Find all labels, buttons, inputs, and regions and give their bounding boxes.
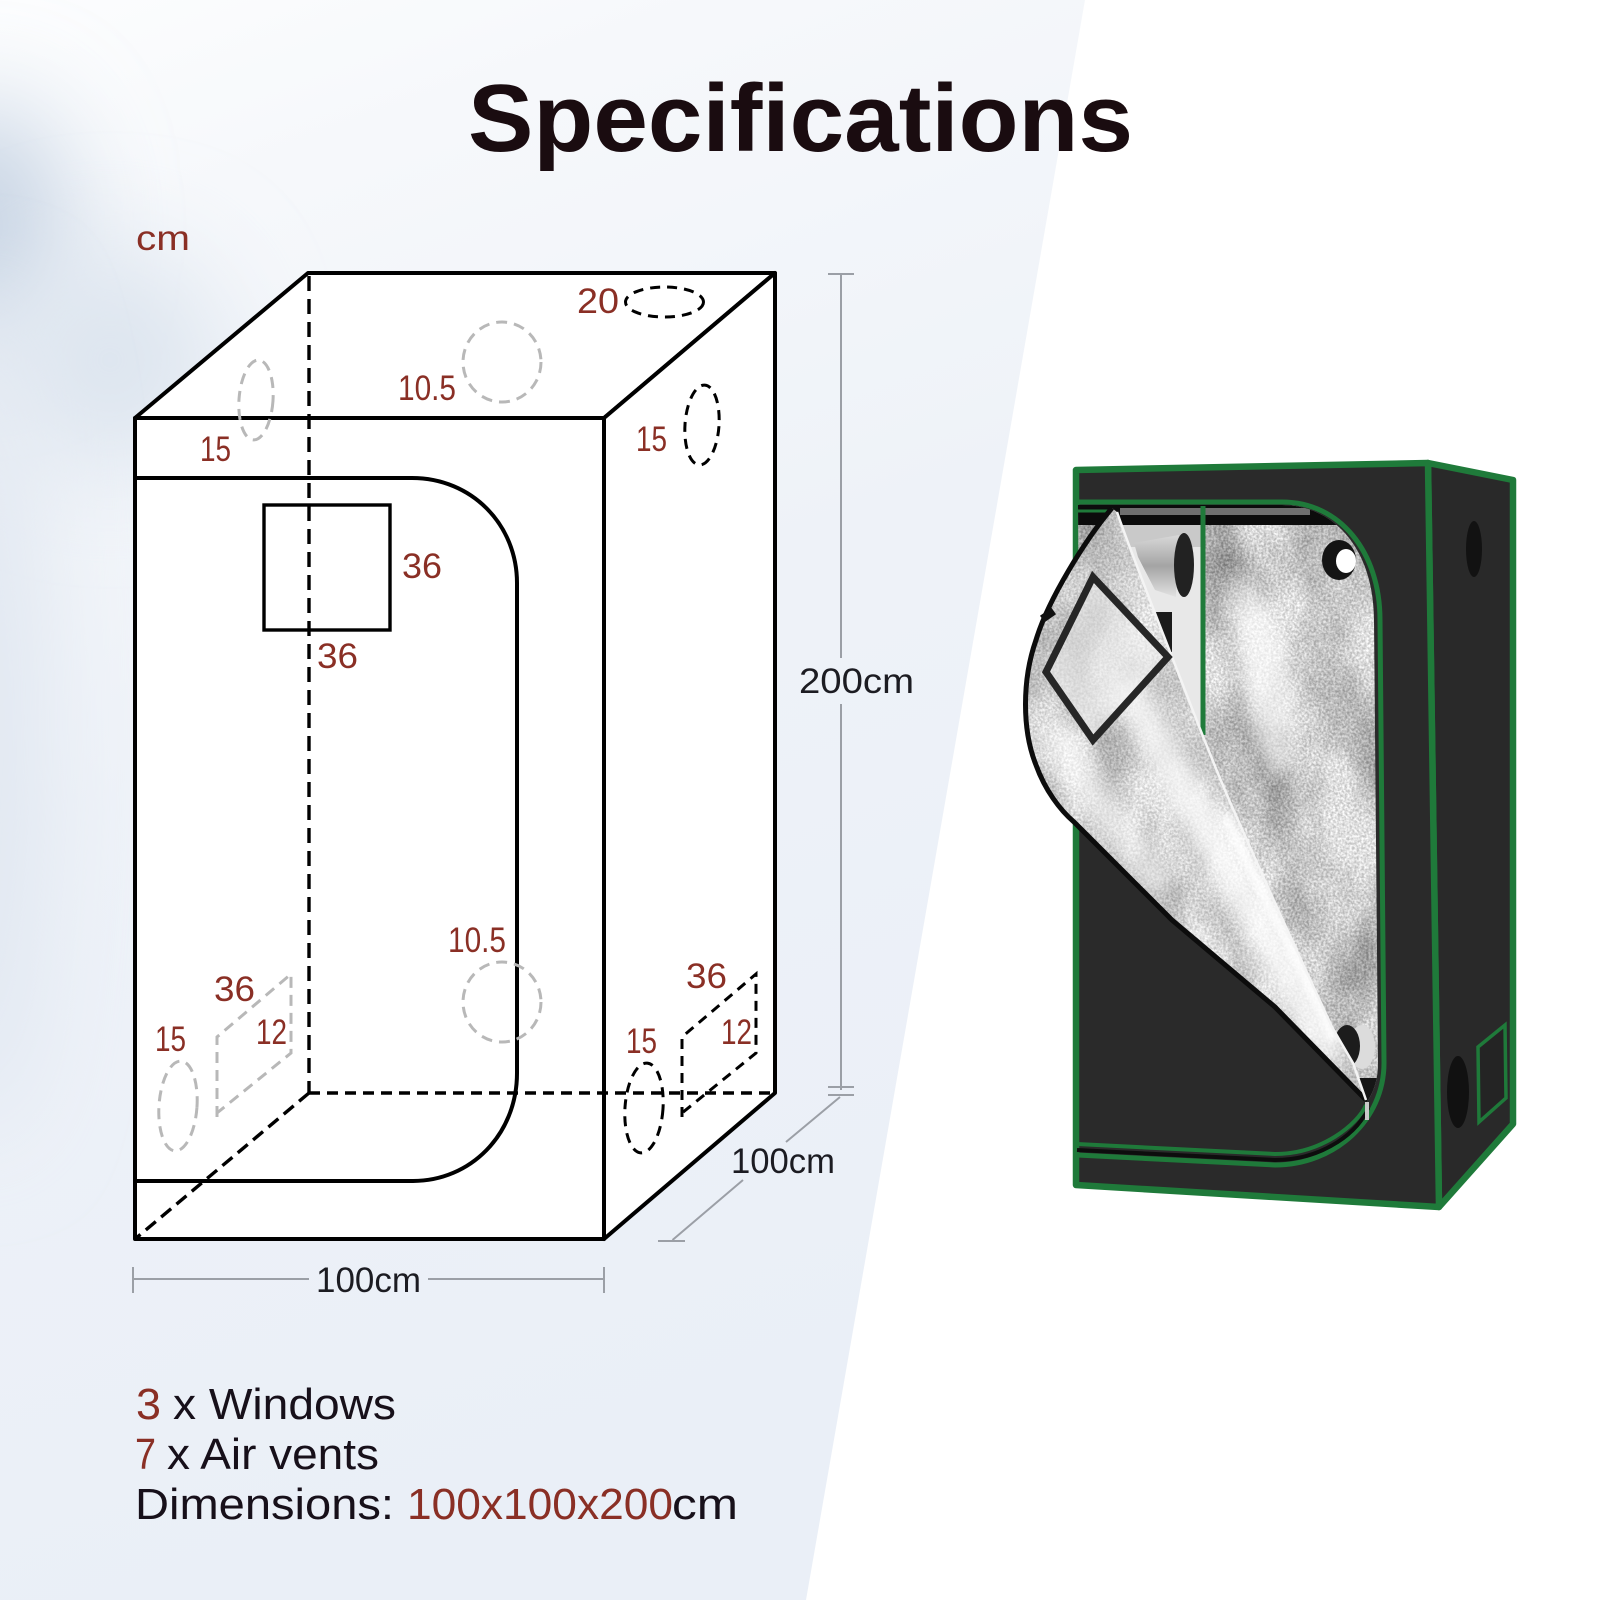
- inner vent collar bottom: [1334, 1025, 1375, 1069]
- measurement labels: 15: [200, 430, 231, 469]
- summary text block: cm: [672, 1480, 738, 1529]
- side air vent lower: [1447, 1056, 1469, 1128]
- measurement labels: 10.5: [448, 921, 506, 960]
- grey hidden vents: [156, 322, 541, 1152]
- dimension: height 200cm: 200cm: [799, 662, 914, 701]
- dimension: depth 100cm: 100cm: [731, 1142, 835, 1181]
- measurement labels: 36: [214, 970, 255, 1009]
- summary text block: [135, 1380, 738, 1529]
- measurement labels: 15: [155, 1020, 186, 1059]
- door bottom zip: [1077, 507, 1368, 1160]
- zipper pull: [1365, 1102, 1369, 1120]
- centre zip strip: [1200, 506, 1206, 735]
- summary text block: Dimensions:: [135, 1480, 394, 1529]
- measurement labels: 15: [626, 1022, 657, 1061]
- door outline: [135, 478, 517, 1181]
- flap strap: [1040, 608, 1056, 622]
- measurement labels: 12: [256, 1013, 287, 1052]
- ceiling fan duct: [1134, 533, 1194, 597]
- box faces: [135, 273, 775, 1239]
- summary text block: x Air vents: [167, 1430, 379, 1479]
- title: Specifications: [468, 65, 1133, 172]
- dimension: width 100cm: [133, 1261, 604, 1300]
- measurement labels: 10.5: [398, 369, 456, 408]
- tent side panel: [1428, 463, 1513, 1207]
- dimension: width 100cm: 100cm: [316, 1261, 421, 1300]
- measurement labels: 36: [317, 637, 358, 676]
- dimension: depth 100cm: [658, 1097, 840, 1241]
- flap window: [1046, 577, 1168, 740]
- summary text block: x Windows: [173, 1380, 396, 1429]
- tent front panel: [1076, 463, 1439, 1207]
- side window: [1478, 1025, 1506, 1122]
- summary text block: 3: [136, 1380, 161, 1429]
- inner vent collar top: [1322, 540, 1356, 580]
- unit label: cm: [136, 219, 190, 258]
- measurement labels: 12: [721, 1013, 752, 1052]
- side air vent upper: [1466, 521, 1482, 577]
- tent interior: [1078, 500, 1388, 1120]
- black vents: [622, 287, 756, 1154]
- measurement labels: 36: [402, 547, 442, 586]
- diagram: tent dimensions box: [135, 273, 776, 1239]
- hidden back edges: [135, 276, 776, 1239]
- door seam green: [1076, 502, 1384, 1165]
- window front: [264, 505, 390, 630]
- summary text block: 100x100x200: [407, 1480, 673, 1529]
- grid fragment: [1156, 612, 1172, 652]
- measurement labels: [155, 282, 752, 1061]
- background panel: [0, 0, 1100, 1600]
- measurement labels: 20: [577, 282, 619, 321]
- door flap: [1020, 505, 1370, 1105]
- measurement labels: 36: [686, 957, 727, 996]
- summary text block: 7: [135, 1430, 156, 1479]
- dimension: height 200cm: [799, 274, 914, 1095]
- product photo: grow tent: [1020, 463, 1513, 1207]
- interior light patch: [1235, 580, 1291, 773]
- measurement labels: 15: [636, 420, 667, 459]
